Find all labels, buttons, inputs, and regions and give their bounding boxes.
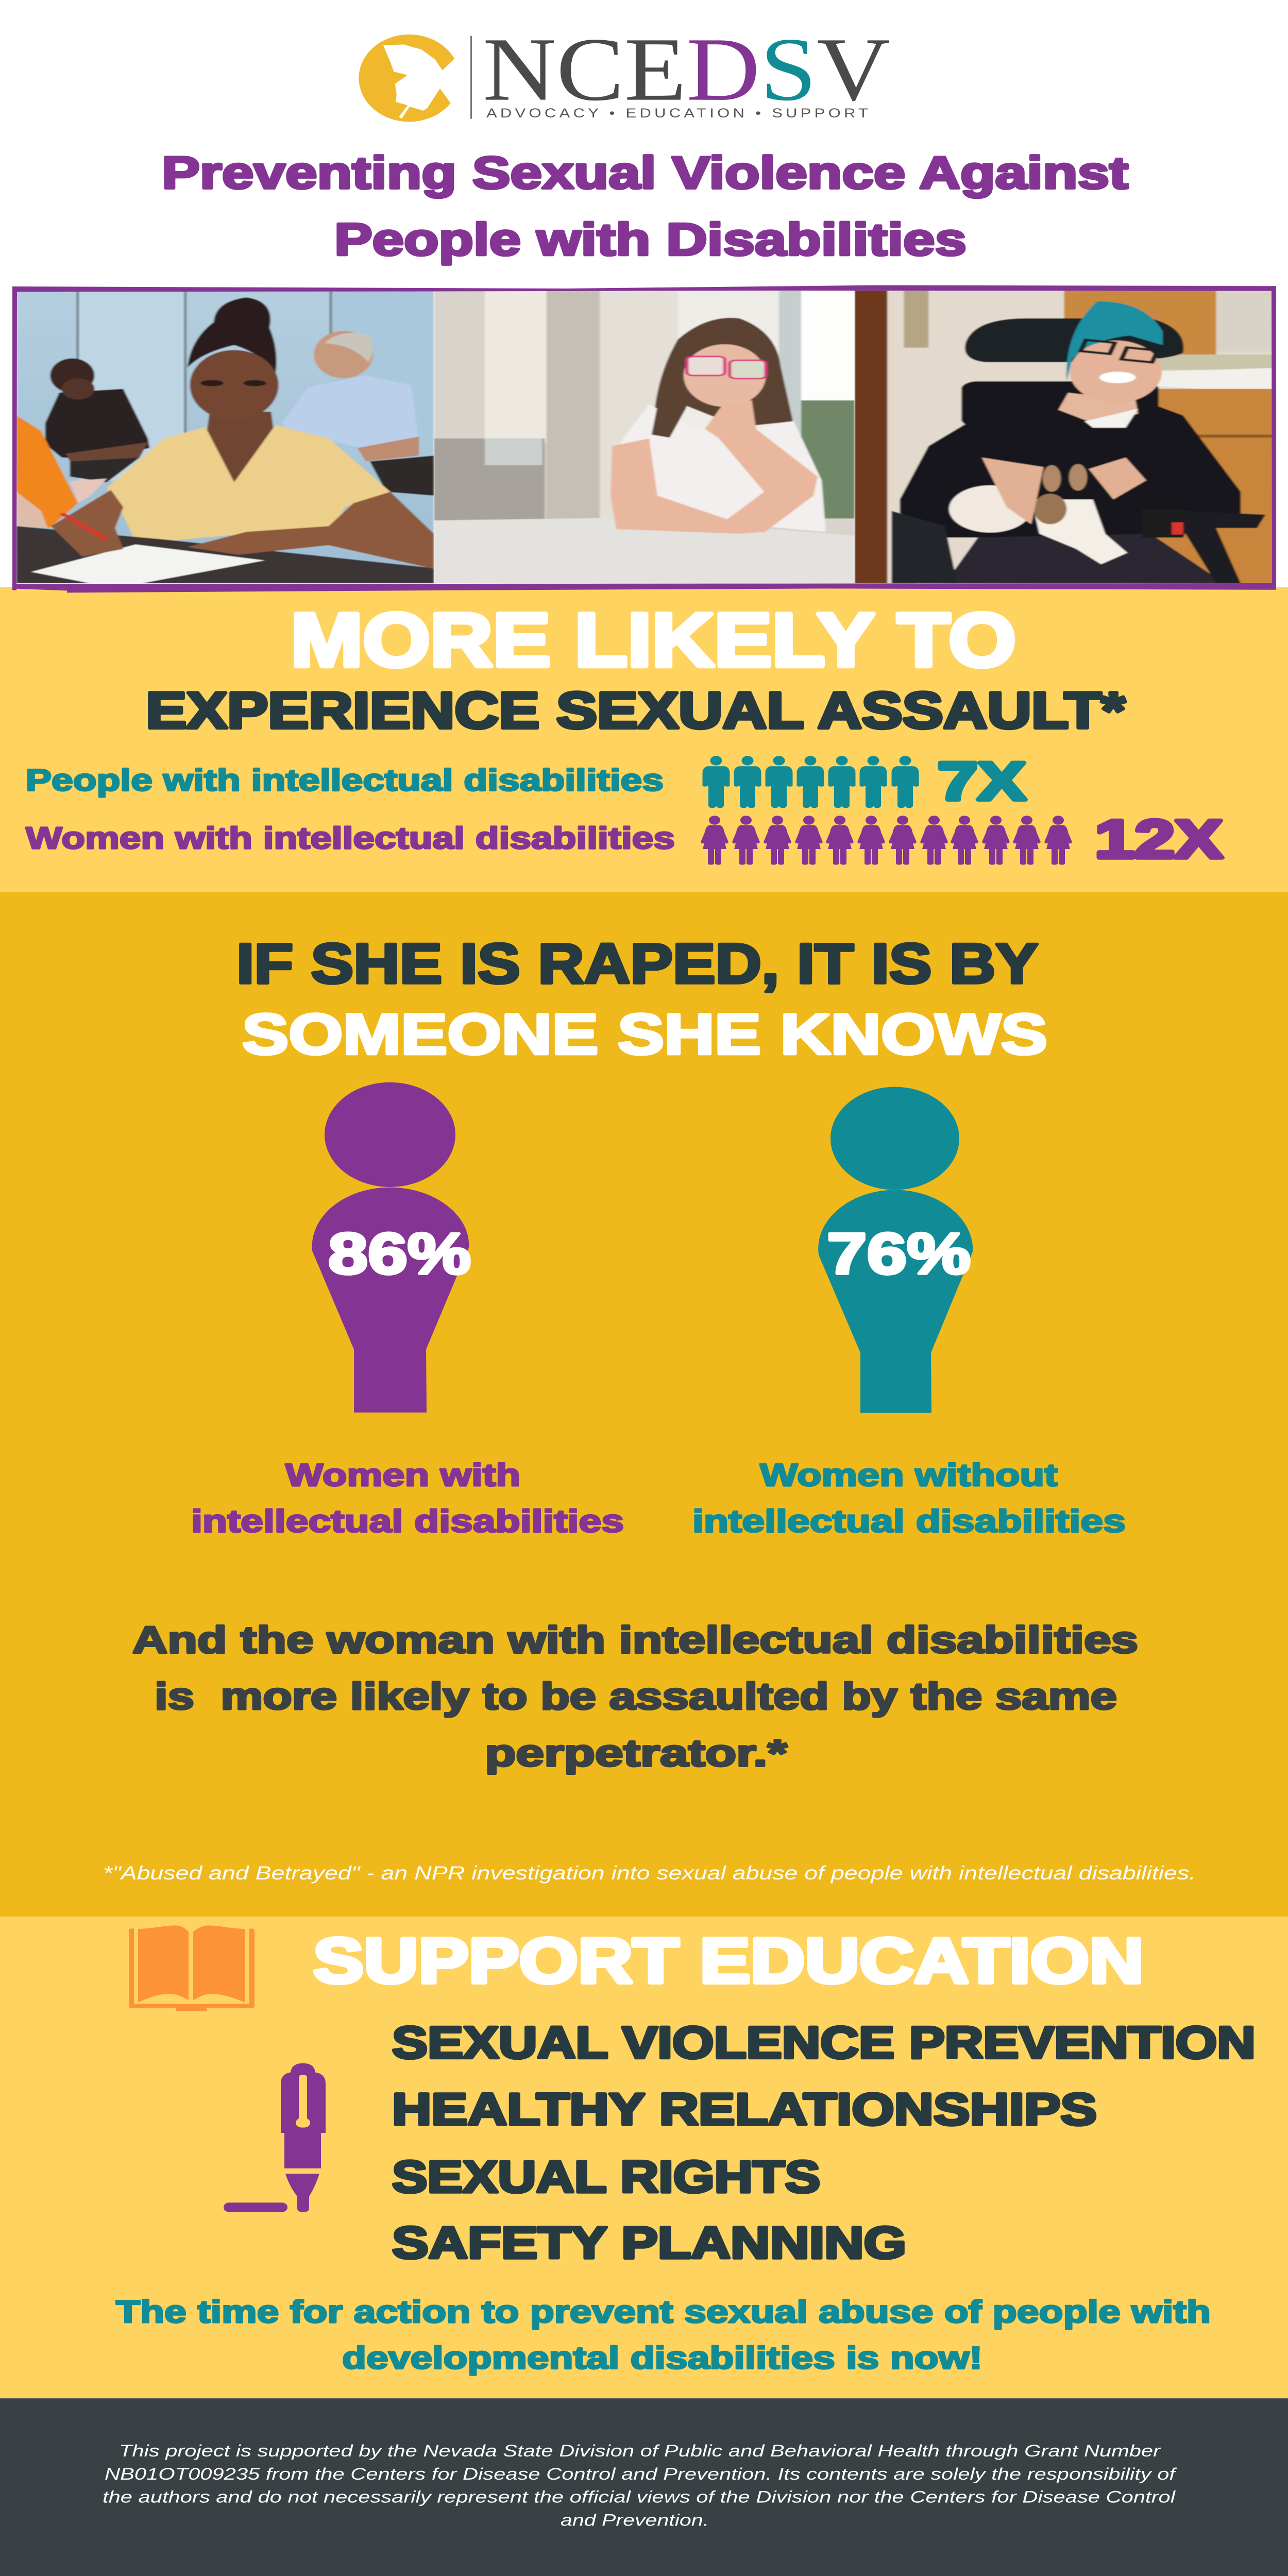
heading: experience sexual assault: EXPERIENCE SEXUAL ASSAULT* — [146, 682, 1125, 739]
label: women with — [191, 1458, 624, 1539]
logo wordmark: NCEDSV — [483, 19, 890, 120]
label: women: Women with intellectual disabilities — [26, 821, 675, 855]
heading: more likely to: MORE LIKELY TO — [291, 598, 1016, 683]
value: 76%: 76% — [827, 1221, 971, 1286]
label: women without: Women without — [760, 1458, 1058, 1493]
photo: woman with pink glasses — [434, 291, 855, 583]
call to action — [116, 2294, 1211, 2376]
heading: someone she knows: SOMEONE SHE KNOWS — [242, 1002, 1047, 1066]
photo frame — [12, 285, 1276, 592]
logo divider — [470, 36, 472, 118]
footer text — [103, 2441, 1177, 2529]
chart: purple figure 86% — [312, 1082, 471, 1413]
chart: teal figure 76% — [818, 1087, 973, 1413]
text block: same perpetrator: is more likely to be assaulted by the same — [155, 1675, 1117, 1718]
heading: support education: SUPPORT EDUCATION — [313, 1925, 1144, 1996]
footnote: *"Abused and Betrayed" - an NPR investigation into sexual abuse of people with intellectual disabilities. — [103, 1862, 1196, 1884]
photo: woman in wheelchair with rabbit — [855, 291, 1274, 583]
photo strip — [12, 285, 1276, 592]
heading: if she is raped: IF SHE IS RAPED, IT IS BY — [236, 933, 1038, 995]
title: People with Disabilities — [334, 215, 967, 265]
text block: same perpetrator — [132, 1619, 1138, 1774]
panel: funding footer — [0, 2398, 1288, 2576]
call to action: developmental disabilities is now! — [342, 2341, 982, 2376]
list: education topics — [392, 2018, 1256, 2268]
list: education topics: SEXUAL VIOLENCE PREVENTION — [392, 2018, 1256, 2067]
footer text: NB01OT009235 from the Centers for Disease Control and Prevention. Its contents are solely the responsibility of — [105, 2464, 1177, 2483]
icon: butterfly circle — [359, 35, 467, 122]
value: 86%: 86% — [328, 1221, 471, 1286]
list: education topics: SEXUAL RIGHTS — [392, 2152, 820, 2202]
stat: 12X: 12X — [1095, 809, 1223, 870]
logo: NCEDSV — [359, 19, 890, 122]
stat row: women — [26, 809, 1223, 870]
label: people: People with intellectual disabilities — [26, 763, 664, 798]
icon: open book — [129, 1925, 255, 2011]
icons: twelve women — [701, 816, 1072, 865]
footer text: the authors and do not necessarily represent the official views of the Division nor the Centers for Disease Control — [103, 2487, 1176, 2506]
list: education topics: SAFETY PLANNING — [392, 2218, 906, 2268]
list: education topics: HEALTHY RELATIONSHIPS — [392, 2084, 1097, 2134]
panel: more likely background — [0, 587, 1288, 892]
photo: woman in classroom writing — [16, 291, 434, 584]
footer text: This project is supported by the Nevada State Division of Public and Behavioral Health through Grant Number — [119, 2441, 1161, 2460]
panel: header — [162, 19, 1128, 265]
icon: pen — [224, 2063, 326, 2212]
logo tagline: ADVOCACY • EDUCATION • SUPPORT — [486, 106, 868, 120]
label: women with: intellectual disabilities — [191, 1504, 624, 1539]
text block: same perpetrator: And the woman with intellectual disabilities — [132, 1619, 1138, 1661]
stat row: people — [26, 751, 1026, 811]
stat: 7X: 7X — [938, 751, 1026, 811]
icons: seven people — [703, 756, 919, 808]
title: Preventing Sexual Violence Against — [162, 148, 1128, 198]
panel: support education — [0, 1917, 1288, 2398]
call to action: The time for action to prevent sexual abuse of people with — [116, 2294, 1211, 2329]
panel: more likely to experience sexual assault — [26, 598, 1223, 870]
label: women without — [692, 1458, 1126, 1539]
title — [162, 148, 1128, 265]
text block: same perpetrator: perpetrator.* — [485, 1732, 788, 1774]
panel: someone she knows — [0, 892, 1288, 1917]
label: women with: Women with — [285, 1458, 520, 1493]
label: women without: intellectual disabilities — [692, 1504, 1126, 1539]
footer text: and Prevention. — [561, 2510, 709, 2529]
